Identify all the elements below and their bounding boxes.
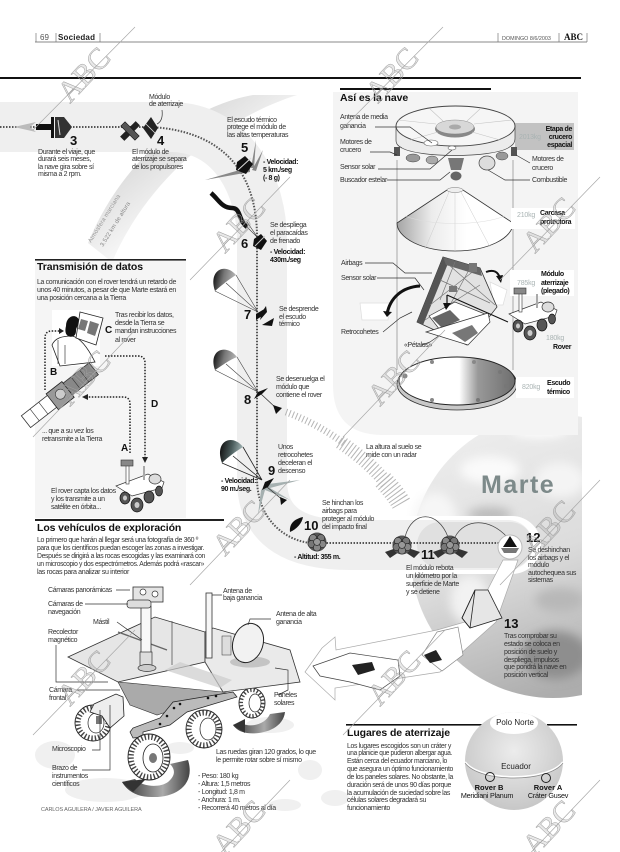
heading: Transmisión de datos (37, 261, 143, 273)
step 4: separation: 4 (157, 133, 165, 148)
top rule (0, 77, 581, 79)
step 7: main parachute: térmico (279, 321, 300, 328)
label band: cruise stage: crucero (549, 134, 572, 141)
intro text (37, 279, 176, 302)
rover part labels: Antena de (223, 588, 252, 595)
step 11: bouncing: superficie de Marte (406, 581, 459, 588)
panel: spacecraft background (333, 92, 578, 435)
step 4: separation: de los propulsores (132, 164, 184, 171)
label: heat shield: Escudo (547, 380, 570, 387)
body text: funcionamiento (347, 805, 390, 812)
front wheel (128, 734, 170, 780)
step 5: heat shield: 5 km./seg (263, 167, 292, 174)
label band: cruise stage: 2013kg (519, 134, 541, 141)
rover part labels: ganancia (276, 619, 302, 626)
body text (347, 743, 453, 812)
guide lines (397, 160, 513, 370)
text: C (115, 312, 177, 344)
cruise stage labels: Combustible (532, 177, 568, 184)
globe: Rover B (475, 783, 504, 792)
step 6: drogue parachute: 6 (241, 236, 248, 251)
atmosphere arc (88, 95, 297, 262)
body text: una planicie que pudieron albergar agua. (347, 750, 452, 757)
text: C: desde la Tierra se (115, 320, 165, 327)
intro text (37, 537, 205, 576)
wheels note: le permite rotar sobre sí mismo (216, 757, 302, 764)
heading: Lugares de aterrizaje (347, 727, 450, 739)
step 11: bouncing: un kilómetro por la (406, 573, 457, 580)
panel: Transmisión de datos (20, 259, 186, 512)
step 12: airbags deflate: autochequea sus (528, 570, 577, 577)
radar note: mide con un radar (366, 452, 417, 459)
label: landing module: 785kg (517, 280, 535, 287)
cruise stage labels: ganancia (340, 123, 366, 130)
rover part labels: Recolector (48, 629, 79, 636)
specs: - Longitud: 1,8 m (198, 789, 245, 796)
atmosphere arc: 3.522 km de altura (100, 201, 132, 248)
step 10: airbags inflate (290, 500, 375, 561)
cruise stage labels (340, 114, 568, 184)
cruise stage labels: Buscador estelar (340, 177, 388, 184)
globe: Polo Norte (496, 718, 534, 727)
label: backshell: protectora (540, 219, 572, 226)
step 12: airbags deflate: 12 (526, 530, 540, 545)
step 13: opening: estado se coloca en (504, 641, 560, 648)
header (35, 32, 587, 42)
rover part labels: frontal (49, 695, 67, 702)
rover in spacecraft (509, 288, 557, 340)
high gain antenna (222, 619, 270, 668)
solar deck (68, 617, 205, 682)
rear wheels (186, 688, 265, 748)
text: rover (51, 488, 117, 511)
step 11: bouncing: 11 (421, 547, 435, 562)
step 5: heat shield: (- 8 g) (263, 175, 280, 182)
globe: Meridiani Planum (461, 791, 513, 800)
globe (461, 712, 569, 810)
step 4: separation (115, 94, 187, 171)
cruise stage labels: Motores de (340, 139, 372, 146)
rover part labels: Antena de alta (276, 611, 317, 618)
label: airbags and retrorockets (341, 260, 440, 349)
arrow D: D (151, 399, 158, 410)
mast and camera head (127, 587, 163, 672)
intro text: las rocas para analizar su interior (37, 569, 130, 576)
step 4: separation: El módulo de (132, 149, 169, 156)
step 12: airbags deflate: módulo (528, 562, 549, 569)
header: DOMINGO 8/6/2003 (502, 36, 551, 42)
text: retransmission: ... que a su vez los (42, 428, 94, 435)
step 5: heat shield: protege el módulo de (227, 124, 286, 131)
step 9: retrorockets: deceleran el (278, 460, 313, 467)
step 13: opening: 13 (504, 616, 518, 631)
operator at console (52, 310, 112, 366)
rover part labels: navegación (48, 609, 81, 616)
specs: - Recorrerá 40 metros al día (198, 805, 276, 812)
step 4: separation: Módulo (149, 94, 170, 101)
arrow B (45, 328, 64, 390)
panel: Mars planet (412, 416, 582, 698)
step 10: airbags inflate: Se hinchan los (322, 500, 364, 507)
watermarks: ABC (361, 344, 427, 412)
arrow D (105, 356, 158, 463)
rover part labels: Cámaras panorámicas (48, 587, 113, 594)
text: C: al rover (115, 337, 137, 344)
label band: cruise stage (515, 123, 574, 150)
step 10: airbags inflate: airbags para (322, 508, 357, 515)
ground shadows (35, 717, 349, 811)
heading: Así es la nave: Así es la nave (340, 92, 408, 104)
low gain antenna (206, 593, 212, 658)
rover part labels: Mástil (93, 619, 110, 626)
operator at console: C (105, 325, 112, 336)
rover part labels (48, 587, 317, 788)
intro text: una posición cercana a la Tierra (37, 295, 126, 302)
text: rover: satélite en órbita... (51, 504, 101, 511)
rover part labels: científicos (52, 781, 80, 788)
step 10: airbags inflate: 10 (304, 518, 318, 533)
step 5: heat shield: 5 (241, 140, 248, 155)
step 8: module lowered: Se desenuelga el (276, 376, 325, 383)
atmosphere arc: Atmósfera marciana (88, 193, 122, 244)
step 12: airbags deflate (498, 530, 577, 584)
cruise stage (394, 106, 517, 180)
watermarks: ABC (206, 494, 272, 562)
step 6: drogue parachute: - Velocidad: (270, 249, 305, 256)
cruise stage labels: Sensor solar (340, 164, 376, 171)
label: airbags and retrorockets: Airbags (341, 260, 363, 267)
step 10: airbags inflate: del impacto final (322, 524, 367, 531)
body text: de los paneles solares. No obstante, la (347, 774, 453, 781)
cruise stage labels: crucero (340, 147, 361, 154)
intro text: para que los científicos puedan escoger las zonas a investigar. (37, 545, 204, 552)
rover (68, 587, 300, 797)
step 9: retrorockets: 90 m./seg. (221, 486, 252, 493)
label: heat shield (516, 377, 574, 398)
wheels note: Las ruedas giran 120 grados, lo que (216, 749, 316, 756)
panel: Los vehículos de exploración (35, 519, 349, 813)
watermarks: ABC (51, 344, 117, 412)
step 3: cruise: Durante el viaje, que (38, 149, 95, 156)
panel: Lugares de aterrizaje (346, 712, 577, 812)
cruise stage labels: Antena de media (340, 114, 388, 121)
radar note: La altura al suelo se (366, 444, 422, 451)
step 11: bouncing: El módulo rebota (406, 565, 454, 572)
step 4: separation: aterrizaje se separa (132, 156, 187, 163)
header: 69 (40, 33, 49, 42)
step 3: cruise: la nave gira sobre sí (38, 164, 94, 171)
watermarks: ABC (516, 191, 582, 259)
rover part labels: Paneles (274, 692, 298, 699)
rover part labels: solares (274, 700, 295, 707)
watermarks: ABC (51, 644, 117, 712)
specs: - Anchura: 1 m. (198, 797, 241, 804)
globe: Ecuador (501, 762, 531, 771)
step 12: airbags deflate: sistemas (528, 577, 554, 584)
text: rover: y los transmite a un (51, 496, 105, 503)
satellite (20, 361, 100, 430)
folded landing module (360, 257, 508, 345)
trajectory band (0, 127, 512, 545)
step 13: opening: posición de suelo y (504, 649, 558, 656)
text: C: mandan instrucciones (115, 328, 177, 335)
step 13: opening: Tras comprobar su (504, 633, 557, 640)
body text: que asegura un óptimo funcionamiento (347, 766, 453, 773)
step 7: main parachute: 7 (244, 307, 251, 322)
step 6: drogue parachute (211, 193, 308, 264)
label: landing module: (plegado) (541, 288, 569, 295)
step 8: module lowered (213, 350, 325, 414)
body text: Están cerca del ecuador marciano, lo (347, 758, 447, 765)
step 6: drogue parachute: el paracaídas (270, 230, 308, 237)
label: landing module (510, 270, 574, 296)
step 9: retrorockets: descenso (278, 468, 306, 475)
step 12: airbags deflate: Se deshinchan (528, 547, 570, 554)
step 13: opening: posición vertical (504, 672, 549, 679)
trajectory dotted line (0, 127, 510, 543)
watermarks: ABC (359, 41, 425, 109)
text: C: Tras recibir los datos, (115, 312, 174, 319)
arrow A (82, 394, 130, 454)
globe: Cráter Gusev (528, 791, 569, 800)
step 4: separation: de aterrizaje (149, 101, 183, 108)
watermarks: ABC (361, 644, 427, 712)
heading: Los vehículos de exploración (37, 522, 181, 534)
rover part labels: baja ganancia (223, 595, 262, 602)
specs (198, 773, 276, 812)
cruise stage labels: crucero (532, 165, 553, 172)
radar hatch (286, 412, 402, 505)
leader lines (56, 590, 288, 770)
step 3: cruise (14, 117, 95, 178)
body text: la acumulación de suciedad sobre las (347, 790, 451, 797)
step 3: cruise: misma a 2 rpm. (38, 171, 82, 178)
step 6: drogue parachute: Se despliega (270, 222, 307, 229)
rover part labels: Cámaras de (48, 601, 83, 608)
panel: Así es la nave (340, 88, 575, 410)
intro text: Lo primero que harán al llegar será una fotografía de 360 º (37, 537, 199, 544)
rover part labels: Cámara (49, 687, 72, 694)
small rover (116, 460, 164, 512)
step 11: bouncing (385, 517, 507, 596)
step 7: main parachute (213, 269, 319, 328)
label band: cruise stage: Etapa de (546, 126, 572, 133)
step 5: heat shield (205, 117, 298, 182)
intro text: un microscopio y dos espectrómetros. Además podrá «rascar» (37, 561, 204, 568)
label: airbags and retrorockets: «Pétalos» (404, 342, 432, 349)
step 8: module lowered: 8 (244, 392, 251, 407)
rotation arrows (122, 712, 285, 797)
step 3: cruise: durará seis meses, (38, 156, 91, 163)
step 13: opening (305, 560, 567, 700)
step 5: heat shield: las altas temperaturas (227, 132, 289, 139)
label: backshell (511, 208, 575, 229)
rover part labels: magnético (48, 637, 78, 644)
protective backshell (397, 188, 513, 251)
intro text: Después se dirigirá a las rocas escogidas y las examinará con (37, 553, 205, 560)
body text: duración será de unos 90 días porque (347, 782, 451, 789)
suspension (130, 692, 237, 738)
step 9: retrorockets: Unos (278, 444, 294, 451)
label: heat shield: térmico (547, 389, 570, 396)
label: landing module: aterrizaje (541, 280, 569, 287)
body text: Los lugares escogidos son un cráter y (347, 743, 452, 750)
label: airbags and retrorockets: Retrocohetes (341, 329, 379, 336)
step 9: retrorockets: 9 (268, 463, 275, 478)
step 6: drogue parachute: 430m./seg (270, 257, 301, 264)
step 13: opening: que pondrá la nave en (504, 664, 567, 671)
label: backshell: Carcasa (540, 210, 565, 217)
text: retransmission: retransmite a la Tierra (42, 436, 102, 443)
step 9: retrorockets: retrocohetes (278, 452, 314, 459)
left wheel and arm (75, 694, 124, 741)
wheels note (216, 749, 316, 764)
rover part labels: instrumentos (52, 773, 89, 780)
body text: células solares degradará su (347, 797, 426, 804)
text: retransmission (42, 428, 102, 443)
label band: cruise stage: espacial (547, 142, 572, 149)
step 13: opening: despliega, impulsos (504, 657, 560, 664)
watermarks: ABC (206, 191, 272, 259)
watermarks: ABC (51, 41, 117, 109)
header: ABC (564, 32, 583, 42)
step 6: drogue parachute: de frenado (270, 238, 300, 245)
step 3: cruise: 3 (70, 133, 77, 148)
label: rover: 180kg (546, 335, 564, 342)
step 9: retrorockets (220, 440, 314, 515)
arrow B: B (50, 367, 57, 378)
cruise stage labels: Motores de (532, 156, 564, 163)
step 8: module lowered: contiene el rover (276, 392, 323, 399)
credit: CARLOS AGUILERA / JAVIER AGUILERA (41, 807, 142, 813)
label: rover: Rover (553, 344, 572, 351)
globe: Rover A (534, 783, 563, 792)
text: rover: El rover capta los datos (51, 488, 117, 495)
label: airbags and retrorockets: Sensor solar (341, 275, 377, 282)
step 10: airbags inflate: - Altitud: 355 m. (294, 554, 341, 561)
radar note (366, 444, 422, 459)
step 7: main parachute: Se desprende (279, 306, 319, 313)
intro text: unos 40 minutos, a pesar de que Marte estará en (37, 287, 176, 294)
body (118, 682, 236, 715)
step 11: bouncing: y se detiene (406, 589, 440, 596)
step 7: main parachute: el escudo (279, 314, 306, 321)
panel: data transmission background (35, 260, 186, 518)
step 10: airbags inflate: proteger al módulo (322, 516, 375, 523)
specs: - Altura: 1,5 metros (198, 781, 251, 788)
step 9: retrorockets: - Velocidad: (221, 478, 256, 485)
label: landing module: Módulo (541, 271, 564, 278)
Marte label: Marte (481, 471, 555, 499)
label: heat shield: 820kg (522, 384, 540, 391)
label: rover (546, 335, 572, 351)
intro text: La comunicación con el rover tendrá un retardo de (37, 279, 176, 286)
rover part labels: Microscopio (52, 746, 86, 753)
specs: - Peso: 180 kg (198, 773, 239, 780)
arrow A: A (121, 443, 128, 454)
heat shield (397, 357, 517, 410)
rover part labels: Brazo de (52, 765, 78, 772)
step 5: heat shield: - Velocidad: (263, 159, 298, 166)
watermarks: ABC (516, 494, 582, 562)
header: Sociedad (58, 33, 95, 42)
label: backshell: 210kg (517, 212, 535, 219)
step 5: heat shield: El escudo térmico (227, 117, 277, 124)
step 12: airbags deflate: los airbags y el (528, 555, 570, 562)
step 8: module lowered: módulo que (276, 384, 310, 391)
